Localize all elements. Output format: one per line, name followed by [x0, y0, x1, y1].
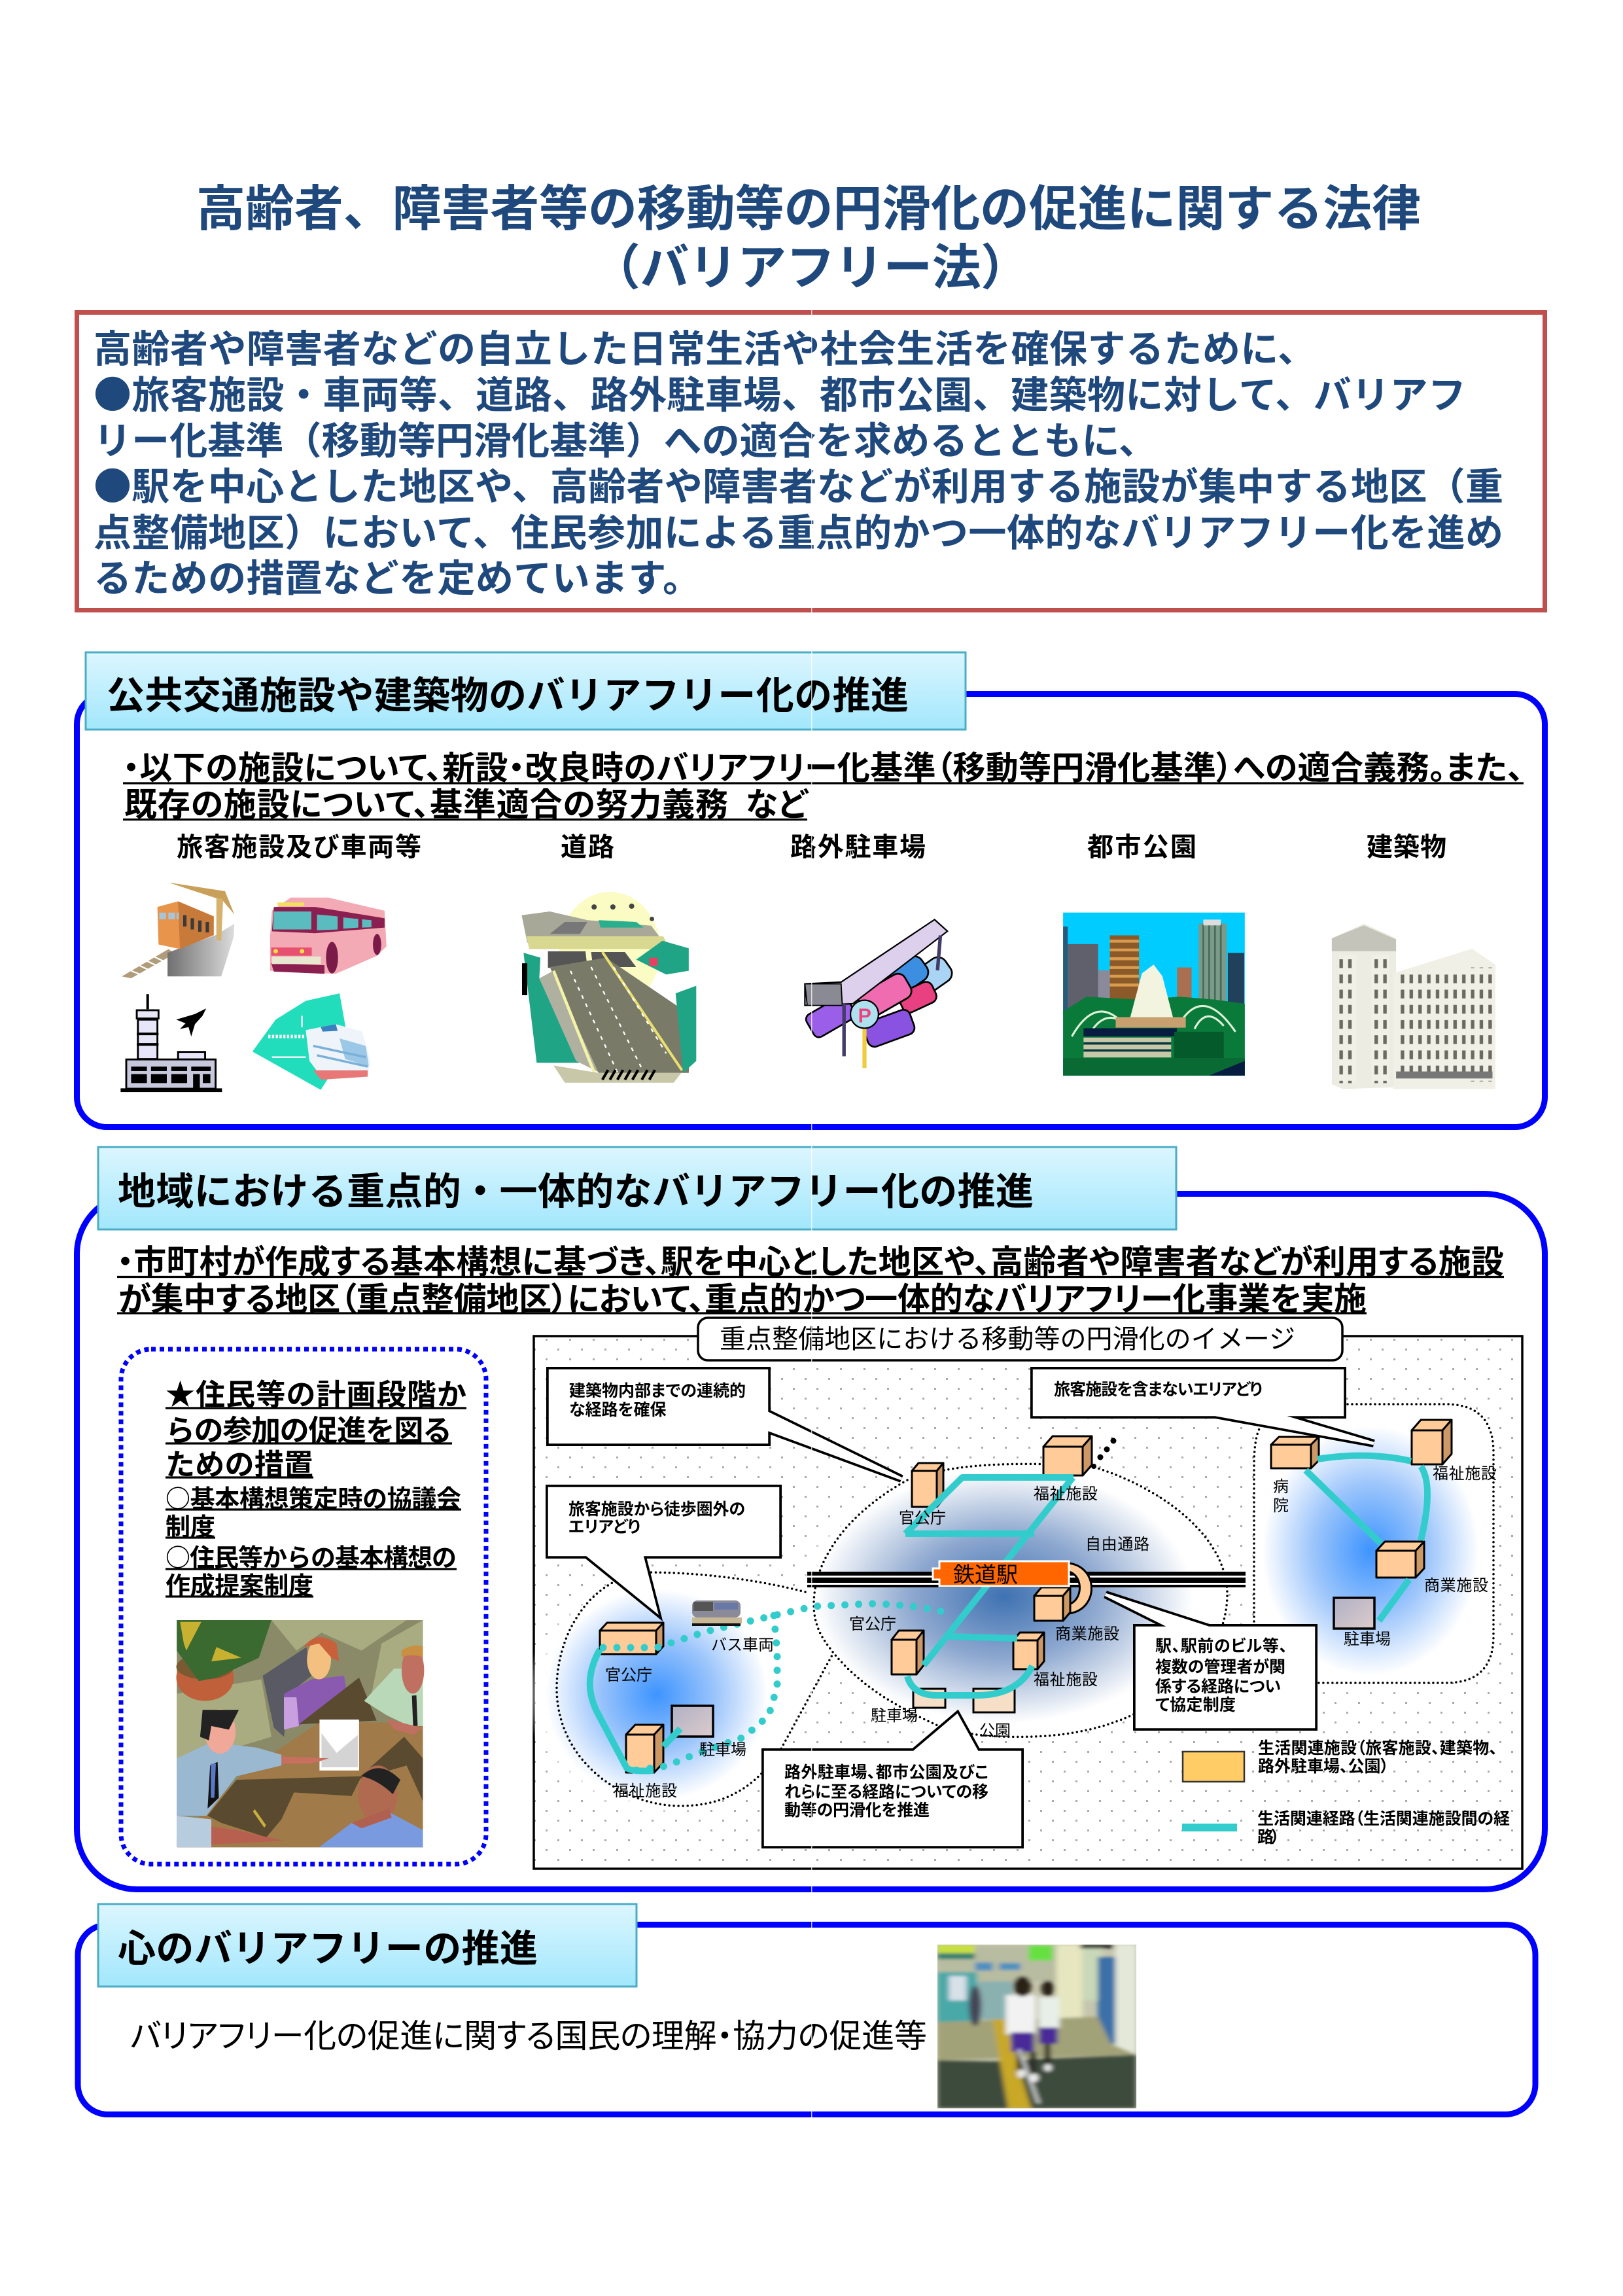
text block: participation measures: ための措置	[166, 1448, 313, 1481]
blob: right area shading	[1243, 1404, 1498, 1698]
place labels: 福祉施設	[1034, 1671, 1098, 1689]
callout: parking and parks: 路外駐車場、都市公園及びこ	[784, 1763, 988, 1782]
place labels: バス車両	[711, 1636, 774, 1654]
text block: participation measures: 制度	[166, 1514, 215, 1542]
text block: participation measures: ○住民等からの基本構想の	[166, 1538, 457, 1574]
legend: route: 生活関連経路（生活関連施設間の経	[1257, 1810, 1510, 1828]
column labels: 都市公園	[1087, 833, 1196, 862]
photo: guiding students	[937, 1945, 1136, 2108]
icon: building	[1332, 924, 1495, 1089]
illustration: meeting	[177, 1620, 424, 1847]
place labels: 商業施設	[1424, 1577, 1488, 1595]
title: （バリアフリー法）	[591, 240, 1030, 295]
text block: obligations	[123, 750, 1524, 823]
icon: airport	[120, 994, 222, 1092]
callout: continuous route into buildings: な経路を確保	[569, 1401, 666, 1419]
rail tracks	[807, 1572, 1246, 1587]
callout: area outside walking range	[550, 1489, 778, 1611]
callout: continuous route into buildings: 建築物内部までの連続的	[569, 1382, 746, 1400]
place labels: 自由通路	[1085, 1536, 1149, 1553]
facility: parking central	[913, 1689, 945, 1708]
arch: free passage	[1069, 1563, 1091, 1614]
column labels: 道路	[561, 833, 614, 862]
place labels: 福祉施設	[613, 1782, 677, 1800]
text block: obligations: 既存の施設について、基準適合の努力義務 など	[124, 786, 809, 823]
text block: basic plan: ・市町村が作成する基本構想に基づき、駅を中心とした地区や、高齢者や障害者などが利用する施設	[117, 1244, 1504, 1280]
diagram title	[698, 1318, 1342, 1360]
text block: public understanding: バリアフリー化の促進に関する国民の理解・協力の促進等	[130, 2018, 927, 2055]
callout: parking and parks: れらに至る経路についての移	[784, 1783, 988, 1801]
icon: ship	[253, 993, 370, 1090]
dots: continuation marks	[1091, 1438, 1116, 1469]
legend: route: 路）	[1257, 1828, 1280, 1846]
column labels: 路外駐車場	[790, 833, 926, 862]
column labels: 建築物	[1367, 833, 1446, 862]
facility: government office lower	[892, 1631, 924, 1674]
routes: left	[590, 1650, 680, 1771]
facility: hospital right	[1271, 1437, 1319, 1468]
callout: area without passenger facilities: 旅客施設を含まないエリアどり	[1054, 1381, 1263, 1399]
heading: priority district	[98, 1147, 1176, 1229]
panel: summary text box: リー化基準（移動等円滑化基準）への適合を求めるとともに、	[94, 420, 1157, 463]
place labels: 官公庁	[605, 1667, 652, 1684]
facility: government office left	[600, 1623, 663, 1654]
facility: commercial right	[1376, 1542, 1424, 1578]
text block: participation measures: 作成提案制度	[166, 1573, 313, 1600]
icon: parking: P	[858, 1006, 871, 1027]
outline: left area	[557, 1572, 833, 1806]
place labels: 官公庁	[899, 1510, 946, 1527]
callout: parking and parks: 動等の円滑化を推進	[784, 1801, 930, 1820]
place labels: 院	[1273, 1497, 1289, 1515]
heading: priority district: 地域における重点的・一体的なバリアフリー化の推進	[118, 1171, 1034, 1213]
callout: agreement system: て協定制度	[1155, 1696, 1236, 1714]
text block: participation measures: らの参加の促進を図る	[166, 1414, 452, 1447]
column labels: 旅客施設及び車両等	[177, 833, 421, 862]
place labels	[605, 1465, 1497, 1800]
facility: welfare right	[1412, 1420, 1452, 1464]
column labels	[177, 833, 1446, 862]
heading: barrier free of the heart	[98, 1904, 637, 1987]
icon: city park	[1063, 913, 1245, 1076]
panel: summary text box: 点整備地区）において、住民参加による重点的かつ一体的なバリアフリー化を進め	[94, 512, 1503, 555]
callout: area outside walking range: エリアどり	[568, 1518, 640, 1536]
callout: agreement system: 駅、駅前のビル等、	[1155, 1637, 1287, 1655]
blob: left area shading	[526, 1570, 788, 1819]
facility: central government office top	[912, 1463, 943, 1507]
text block: participation measures: ○基本構想策定時の協議会	[166, 1479, 461, 1515]
panel: resident participation	[121, 1349, 486, 1864]
legend: facility: 生活関連施設（旅客施設、建築物、	[1258, 1739, 1497, 1757]
title	[196, 181, 1421, 295]
icon: road	[521, 892, 696, 1083]
legend: facility	[1183, 1739, 1497, 1782]
facility: parking right	[1334, 1598, 1374, 1629]
place labels: 駐車場	[1344, 1631, 1391, 1648]
panel: summary text box: ●旅客施設・車両等、道路、路外駐車場、都市公園、建築物に対して、バリアフ	[94, 364, 1466, 419]
icon: train at platform	[122, 883, 234, 978]
callout: continuous route into buildings	[550, 1371, 901, 1479]
outline: central area	[814, 1464, 1227, 1737]
panel: summary text box: 高齢者や障害者などの自立した日常生活や社会生活を確保するために、	[94, 328, 1316, 371]
panel: summary text box	[77, 313, 1545, 610]
panel: summary text box: ●駅を中心とした地区や、高齢者や障害者などが利用する施設が集中する地区（重	[94, 456, 1503, 511]
facility: welfare top	[1043, 1436, 1092, 1475]
routes: dotted links	[603, 1604, 951, 1771]
facility: welfare left	[626, 1725, 663, 1773]
heading: public transport	[86, 652, 966, 730]
callout: agreement system: 係する経路につい	[1155, 1678, 1281, 1696]
callout: agreement system	[1106, 1595, 1314, 1727]
place labels: 福祉施設	[1034, 1485, 1098, 1503]
place labels: 駐車場	[699, 1741, 746, 1759]
panel: priority district	[77, 1147, 1545, 1890]
callout: agreement system: 複数の管理者が関	[1155, 1657, 1285, 1676]
text block: basic plan: が集中する地区（重点整備地区）において、重点的かつ一体的なバリアフリー化事業を実施	[118, 1281, 1367, 1318]
routes: right	[1306, 1456, 1427, 1621]
heading: public transport: 公共交通施設や建築物のバリアフリー化の推進	[107, 675, 909, 717]
icon: parking	[804, 919, 956, 1068]
blob: central area shading	[795, 1456, 1213, 1737]
legend: facility: 路外駐車場、公園）	[1258, 1757, 1389, 1776]
heading: barrier free of the heart: 心のバリアフリーの推進	[118, 1928, 538, 1970]
text block: participation measures: ★住民等の計画段階か	[166, 1371, 466, 1413]
text block: obligations: ・以下の施設について、新設・改良時のバリアフリー化基準（移動等円滑化基準）への適合義務。また、	[123, 750, 1524, 786]
station: 鉄道駅	[953, 1563, 1018, 1587]
text block: basic plan	[117, 1244, 1504, 1318]
panel: barrier free of the heart	[78, 1904, 1535, 2115]
outline: right area	[1254, 1404, 1493, 1683]
area fills: white grounds inside dotted outlines	[557, 1404, 1493, 1806]
callout: area without passenger facilities	[1034, 1371, 1374, 1443]
panel: summary text box: るための措置などを定めています。	[94, 557, 701, 600]
text block: participation measures	[166, 1371, 466, 1600]
title: 高齢者、障害者等の移動等の円滑化の促進に関する法律	[196, 181, 1421, 236]
icon: bus photo	[692, 1600, 742, 1626]
place labels: 公園	[979, 1722, 1011, 1740]
place labels: 福祉施設	[1433, 1465, 1497, 1483]
legend: route	[1182, 1810, 1510, 1846]
diagram: movement image in priority district	[526, 1318, 1522, 1869]
place labels: 商業施設	[1055, 1625, 1119, 1643]
routes: central	[905, 1477, 1073, 1695]
facility: parking left	[672, 1706, 713, 1737]
place labels: 官公庁	[849, 1616, 896, 1633]
place labels: 駐車場	[871, 1707, 918, 1725]
station	[933, 1561, 1069, 1587]
callout: area outside walking range: 旅客施設から徒歩圏外の	[568, 1500, 745, 1519]
facility: park central	[973, 1689, 1015, 1712]
facility: commercial central	[1034, 1587, 1070, 1621]
icon: bus	[270, 898, 387, 974]
callout: parking and parks	[765, 1716, 1020, 1845]
panel: public transport and buildings	[77, 652, 1545, 1127]
place labels: 病	[1273, 1478, 1289, 1496]
facility: welfare central	[1013, 1633, 1044, 1669]
diagram title: 重点整備地区における移動等の円滑化のイメージ	[720, 1325, 1295, 1354]
